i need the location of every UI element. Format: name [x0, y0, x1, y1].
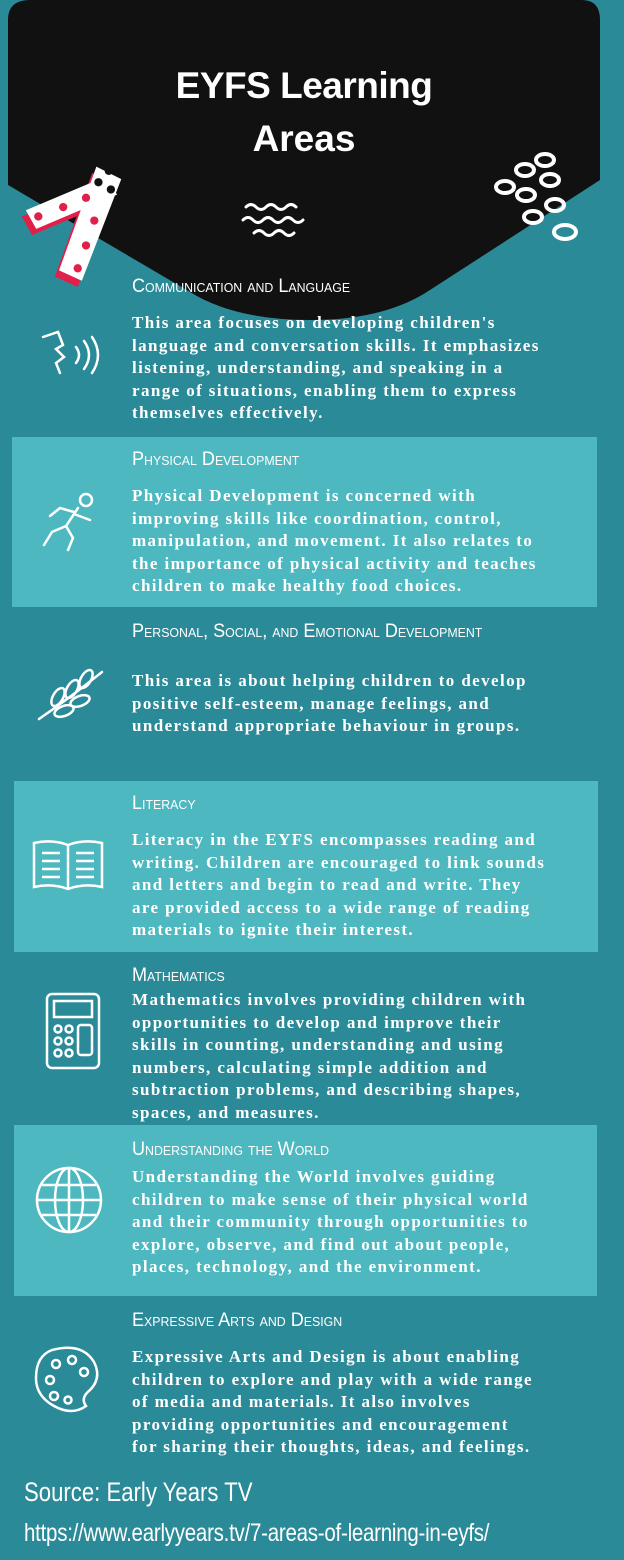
text: children to explore and play with a wide range — [132, 1370, 533, 1388]
text: This area focuses on developing children's — [132, 313, 496, 332]
text: listening, understanding, and speaking in a — [132, 358, 504, 377]
icon: squiggles — [241, 202, 305, 238]
text: opportunities to develop and improve their — [132, 1012, 502, 1032]
text: themselves effectively. — [132, 403, 324, 422]
icon: dotted number seven decoration — [22, 166, 122, 287]
heading: Personal, Social, and Emotional Development — [132, 621, 482, 642]
panel: physical development — [42, 449, 537, 595]
header: black banner — [8, 0, 600, 320]
source: https://www.earlyyears.tv/7-areas-of-learning-in-eyfs/ — [24, 1519, 489, 1547]
icon: speaking head — [42, 330, 100, 374]
text: subtraction problems, and describing shapes, — [132, 1080, 521, 1099]
text: children to make sense of their physical world — [132, 1190, 529, 1208]
text: This area is about helping children to develop — [132, 671, 527, 690]
text — [132, 1347, 533, 1456]
text: places, technology, and the environment. — [132, 1257, 482, 1276]
icon: calculator — [46, 992, 100, 1070]
icon: paint palette — [34, 1346, 98, 1412]
source — [24, 1477, 490, 1547]
text: numbers, calculating simple addition and — [132, 1058, 488, 1076]
text: the importance of physical activity and teaches — [132, 554, 537, 572]
text: understand appropriate behaviour in groups. — [132, 716, 520, 735]
text: explore, observe, and find out about people, — [132, 1234, 510, 1254]
text: materials to ignite their interest. — [132, 920, 414, 939]
panel backgrounds — [12, 437, 597, 607]
text: spaces, and measures. — [132, 1102, 320, 1122]
text: providing opportunities and encouragement — [132, 1414, 509, 1434]
text: Physical Development is concerned with — [132, 486, 476, 505]
text: skills in counting, understanding and using — [132, 1035, 504, 1054]
text: writing. Children are encouraged to link sounds — [132, 852, 545, 872]
text: children to make healthy food choices. — [132, 576, 463, 595]
panel: personal social emotional — [38, 621, 527, 735]
text: are provided access to a wide range of reading — [132, 898, 531, 916]
text: improving skills like coordination, control, — [132, 508, 502, 528]
heading: Communication and Language — [132, 276, 350, 297]
source: Source: Early Years TV — [24, 1477, 252, 1507]
text: Mathematics involves providing children with — [132, 990, 526, 1009]
text: positive self-esteem, manage feelings, and — [132, 694, 490, 712]
icon: open book — [32, 840, 104, 890]
text — [132, 1167, 529, 1276]
panel: communication and language — [42, 276, 540, 422]
text: for sharing their thoughts, ideas, and feelings. — [132, 1437, 531, 1456]
heading: Expressive Arts and Design — [132, 1310, 342, 1331]
text — [132, 990, 526, 1122]
header: black banner: EYFS Learning — [176, 65, 432, 106]
text: and their community through opportunities to — [132, 1212, 529, 1231]
icon: globe — [36, 1166, 102, 1234]
panel: literacy — [32, 793, 545, 939]
icon: running figure — [42, 492, 94, 552]
text: Understanding the World involves guiding — [132, 1167, 496, 1186]
text: manipulation, and movement. It also relates to — [132, 531, 533, 550]
text: Expressive Arts and Design is about enabling — [132, 1347, 520, 1366]
text — [132, 486, 537, 595]
panel: expressive arts and design — [34, 1310, 533, 1456]
text: Literacy in the EYFS encompasses reading and — [132, 830, 536, 849]
text — [132, 830, 545, 939]
heading: Literacy — [132, 793, 196, 814]
header: black banner: Areas — [253, 118, 355, 159]
text — [132, 671, 527, 735]
text: range of situations, enabling them to express — [132, 380, 517, 400]
panel: mathematics — [46, 965, 526, 1122]
icon: ovals decoration — [494, 152, 578, 241]
text: and letters and begin to read and write. They — [132, 875, 522, 894]
heading: Understanding the World — [132, 1139, 329, 1160]
text: language and conversation skills. It emphasizes — [132, 336, 540, 354]
panel: understanding the world — [36, 1139, 529, 1276]
heading: Mathematics — [132, 965, 225, 986]
icon: leaf branch — [38, 668, 104, 720]
heading: Physical Development — [132, 449, 299, 470]
text: of media and materials. It also involves — [132, 1392, 471, 1411]
text — [132, 313, 540, 422]
